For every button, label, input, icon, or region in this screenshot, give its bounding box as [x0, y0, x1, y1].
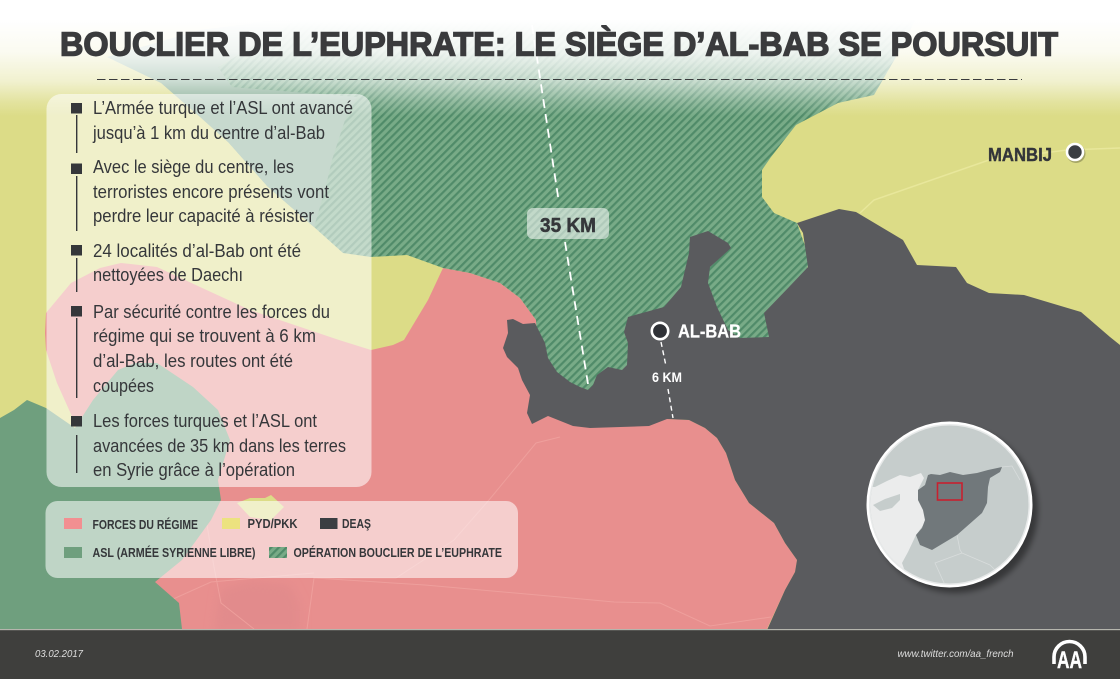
legend item: DAESH: DEAŞ — [342, 516, 371, 531]
point 4: d’al-Bab, les routes ont été — [93, 350, 293, 371]
point 2: perdre leur capacité à résister — [93, 205, 314, 226]
locator rectangle — [938, 483, 962, 500]
point 2: terroristes encore présents vont — [93, 181, 329, 202]
point 5: avancées de 35 km dans les terres — [93, 435, 346, 456]
point 2: Avec le siège du centre, les — [93, 156, 294, 177]
top white fade — [0, 0, 1120, 116]
legend — [46, 501, 518, 578]
Syria — [916, 467, 1002, 550]
point 2 — [71, 156, 329, 231]
source url: www.twitter.com/aa_french — [898, 648, 1014, 660]
darker urban area — [214, 580, 300, 632]
title: BOUCLIER DE L’EUPHRATE: LE SIÈGE D’AL-BAB SE POURSUIT — [60, 26, 1058, 62]
point 3 — [71, 240, 301, 292]
panel: key points — [46, 94, 372, 487]
city marker: Al-Bab — [652, 322, 741, 342]
territory: ASL — [0, 363, 230, 629]
distance line: 35 km — [532, 25, 588, 384]
point 1 — [71, 97, 353, 153]
legend item: ASL: ASL (ARMÉE SYRIENNE LIBRE) — [92, 545, 256, 560]
distance line: 6 km — [652, 342, 682, 418]
sea — [870, 473, 925, 569]
road to Manbij — [860, 148, 1120, 213]
point 5: Les forces turques et l’ASL ont — [93, 410, 317, 431]
point 1: jusqu’à 1 km du centre d’al-Bab — [92, 122, 325, 143]
date: 03.02.2017 — [35, 648, 84, 660]
city marker: Manbij: MANBIJ — [988, 144, 1052, 165]
label: 35 km: 35 KM — [540, 215, 596, 237]
legend item: DAESH — [320, 516, 371, 531]
point 4: régime qui se trouvent à 6 km — [93, 325, 316, 346]
legend item: Euphrates Shield: OPÉRATION BOUCLIER DE L’EUPHRATE — [294, 545, 502, 560]
point 3: nettoyées de Daechı — [93, 264, 243, 285]
logo: AA — [1054, 642, 1085, 674]
territory: regime forces — [45, 263, 797, 629]
Cyprus — [873, 494, 900, 511]
point 5 — [71, 410, 346, 480]
point 4: coupées — [93, 375, 154, 396]
legend item: regime forces — [64, 517, 198, 532]
territory: solid green edge of the operation zone — [107, 17, 357, 227]
point 5: en Syrie grâce à l’opération — [93, 459, 295, 480]
city marker: Al-Bab: AL-BAB — [678, 322, 741, 342]
point 3: 24 localités d’al-Bab ont été — [93, 240, 301, 261]
point 4 — [71, 301, 330, 398]
distance line: 6 km: 6 KM — [652, 370, 682, 385]
inset locator map — [860, 420, 1038, 593]
borders — [935, 466, 1020, 585]
footer bar — [0, 629, 1120, 679]
logo: AA: AA — [1057, 647, 1082, 674]
point 4: Par sécurité contre les forces du — [93, 301, 330, 322]
territory: DAESH — [503, 209, 1120, 630]
legend item: PYD/PKK — [222, 516, 298, 531]
roads in regime area — [171, 437, 771, 629]
legend item: regime forces: FORCES DU RÉGIME — [92, 517, 198, 532]
legend item: PYD/PKK: PYD/PKK — [248, 516, 298, 531]
territory: Euphrates Shield operation — [218, 17, 917, 400]
point 1: L’Armée turque et l’ASL ont avancé — [93, 97, 353, 118]
label: 35 km — [527, 208, 609, 239]
territory: small PYD/PKK pocket — [237, 495, 284, 520]
